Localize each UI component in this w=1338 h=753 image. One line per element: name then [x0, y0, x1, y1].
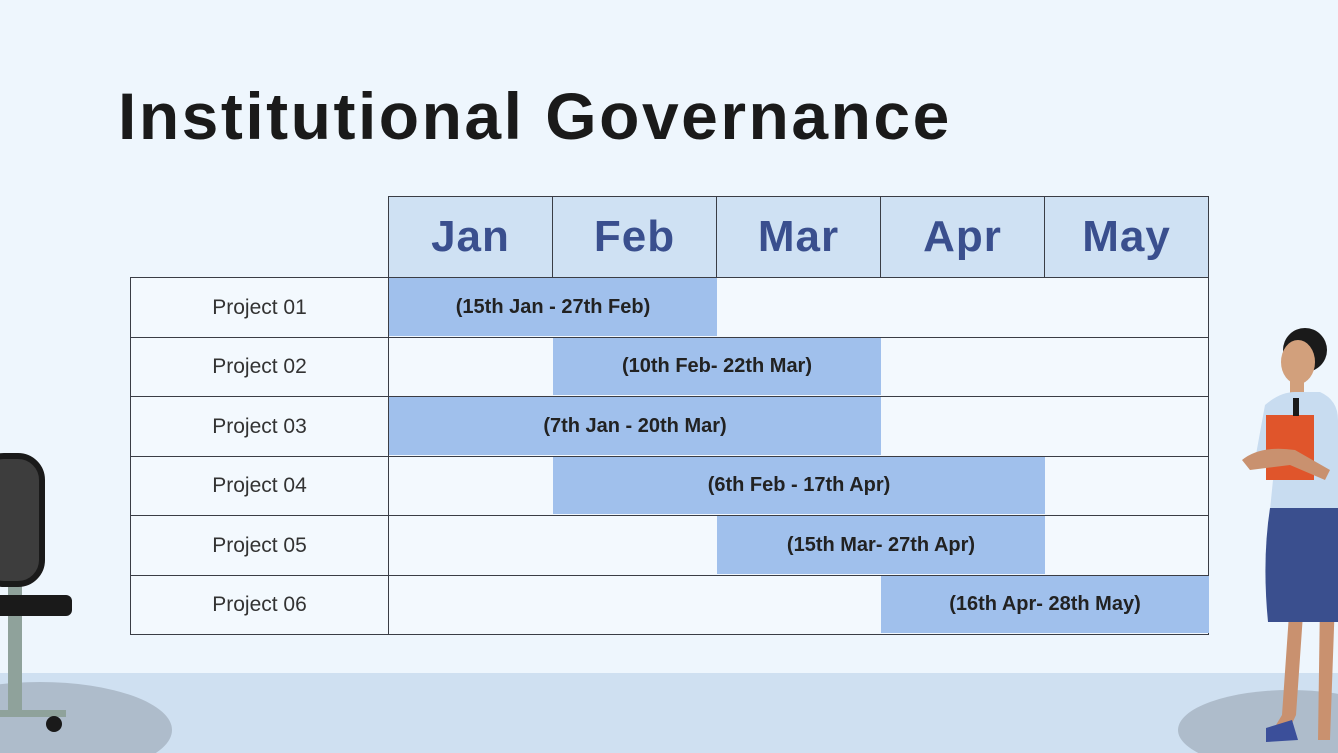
- label Project 05: Project 05: [212, 534, 307, 556]
- row 3: (7th Jan - 20th Mar): [543, 414, 727, 436]
- row 5: [388, 515, 1209, 576]
- header: Jan: [388, 196, 553, 278]
- label Project 02: [130, 337, 389, 397]
- label Project 06: Project 06: [212, 593, 307, 616]
- title: Institutional Governance: [118, 79, 952, 153]
- row 2: (10th Feb- 22th Mar): [622, 355, 812, 377]
- row 4: [388, 456, 1209, 516]
- header: May: May: [1082, 212, 1171, 261]
- label Project 02: Project 02: [212, 355, 307, 378]
- label Project 03: [130, 396, 389, 457]
- illustration: woman holding folder: [1178, 328, 1338, 753]
- label Project 06: [130, 575, 389, 635]
- label Project 05: [130, 515, 389, 576]
- header: Feb: [552, 196, 717, 278]
- header: Mar: Mar: [758, 212, 839, 261]
- row 6: (16th Apr- 28th May): [949, 593, 1141, 615]
- header: Apr: Apr: [923, 212, 1002, 261]
- illustration: chair: [0, 453, 172, 753]
- header: Apr: [880, 196, 1045, 278]
- header: Feb: Feb: [594, 212, 675, 261]
- row 2: [388, 337, 1209, 397]
- floor: [0, 673, 1338, 753]
- label Project 04: Project 04: [212, 474, 307, 497]
- row 1: (15th Jan - 27th Feb): [456, 296, 650, 318]
- row 5: (15th Mar- 27th Apr): [787, 534, 975, 556]
- row 3: [388, 396, 1209, 457]
- header: Mar: [716, 196, 881, 278]
- label Project 01: Project 01: [212, 296, 307, 318]
- header: Jan: Jan: [431, 212, 510, 261]
- label Project 01: [130, 277, 389, 338]
- row 1: [388, 277, 1209, 338]
- row 4: (6th Feb - 17th Apr): [708, 474, 890, 496]
- label Project 04: [130, 456, 389, 516]
- label Project 03: Project 03: [212, 414, 307, 438]
- row 6: [388, 575, 1209, 635]
- header: May: [1044, 196, 1209, 278]
